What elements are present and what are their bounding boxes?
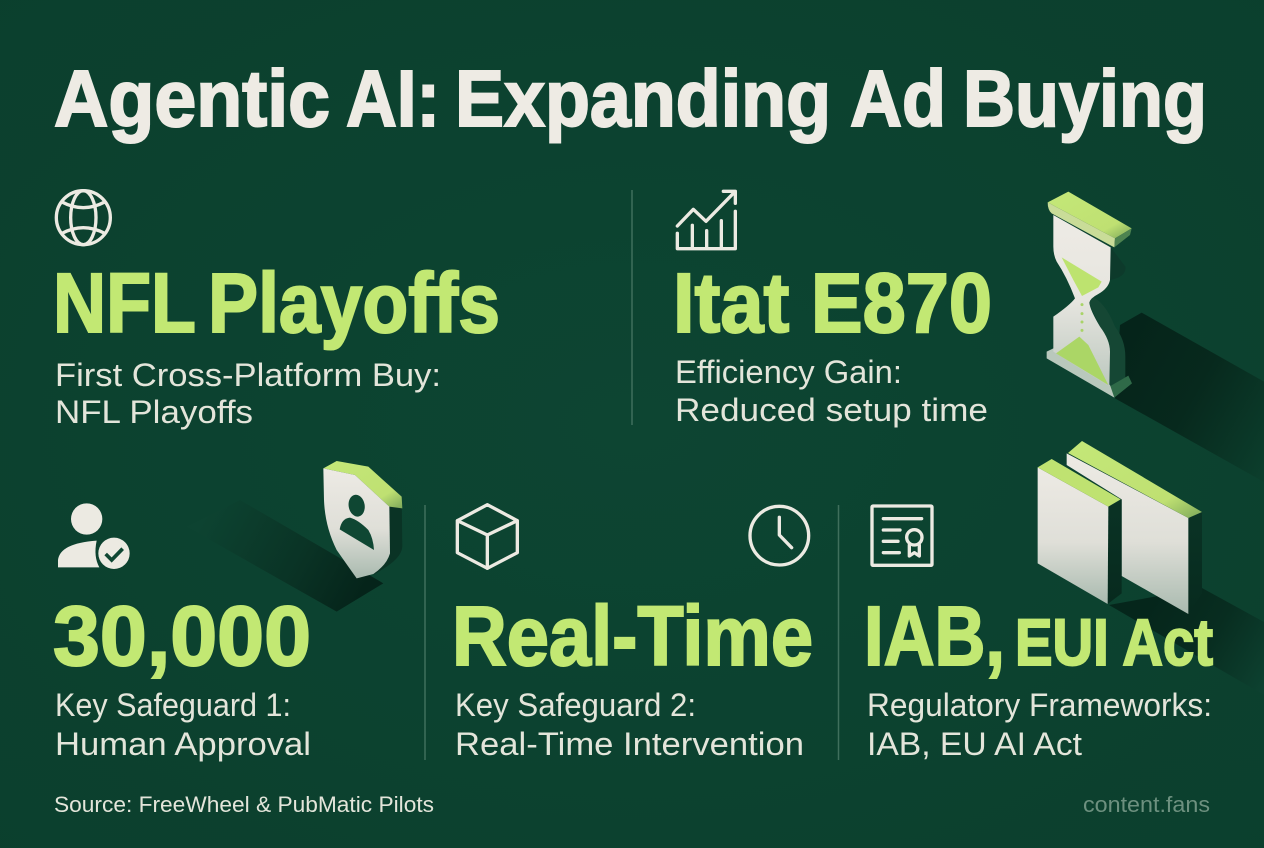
divider bbox=[631, 190, 633, 425]
description: Real-Time Intervention bbox=[455, 726, 804, 762]
icon: clock bbox=[750, 506, 809, 565]
description: Efficiency Gain: bbox=[675, 354, 902, 390]
stat heading: Real-Time bbox=[452, 589, 813, 683]
icon: globe bbox=[56, 191, 110, 245]
description: Regulatory Frameworks: bbox=[867, 687, 1212, 723]
title: AI: bbox=[346, 54, 440, 143]
stat heading bbox=[53, 256, 500, 350]
stat heading bbox=[864, 589, 1213, 683]
stat heading: Playoffs bbox=[208, 256, 500, 350]
illustration: hourglass bbox=[1047, 192, 1264, 482]
icon: certificate bbox=[872, 506, 932, 565]
description: Reduced setup time bbox=[675, 392, 988, 428]
divider bbox=[424, 505, 426, 760]
title: Buying bbox=[963, 54, 1207, 143]
description: NFL Playoffs bbox=[55, 394, 253, 430]
panel: key safeguard 2 bbox=[452, 505, 813, 762]
title: Agentic bbox=[54, 54, 330, 143]
stat heading: EUI Act bbox=[1015, 605, 1213, 679]
panel: efficiency gain bbox=[673, 191, 992, 428]
panel: NFL Playoffs bbox=[53, 191, 500, 430]
description: First Cross-Platform Buy: bbox=[55, 357, 441, 393]
description: IAB, EU AI Act bbox=[867, 726, 1082, 762]
title: Expanding bbox=[455, 54, 831, 143]
illustration: shield bbox=[187, 461, 402, 612]
description: Key Safeguard 1: bbox=[55, 687, 291, 723]
panel: regulatory frameworks bbox=[864, 506, 1213, 762]
stat heading: IAB, bbox=[864, 589, 1005, 683]
stat heading: 30,000 bbox=[53, 589, 311, 683]
panel: key safeguard 1 bbox=[53, 503, 311, 762]
icon: approved user bbox=[58, 503, 130, 569]
title: Ad bbox=[850, 54, 946, 143]
icon: cube bbox=[457, 505, 517, 568]
description: Human Approval bbox=[55, 726, 311, 762]
stat heading: NFL bbox=[53, 256, 196, 350]
source: Source: FreeWheel & PubMatic Pilots bbox=[54, 792, 434, 817]
icon: growth chart bbox=[677, 191, 735, 249]
stat heading: Itat E870 bbox=[673, 256, 992, 350]
title bbox=[54, 54, 1207, 143]
watermark: content.fans bbox=[1083, 792, 1210, 817]
divider bbox=[838, 505, 840, 760]
description: Key Safeguard 2: bbox=[455, 687, 696, 723]
illustration: documents bbox=[1038, 441, 1264, 695]
